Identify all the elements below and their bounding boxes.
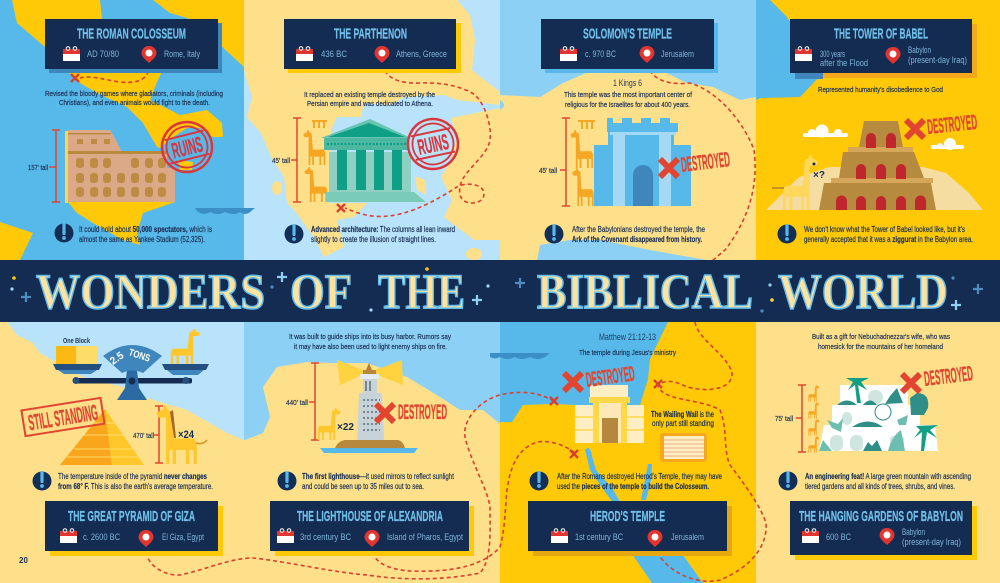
callout: Parthenon fact: slightly to create the illusion of straight lines. [311, 235, 436, 244]
callout: pyramid fact: The temperature inside of the pyramid never changes [58, 472, 207, 481]
ruler: 45 feet [539, 118, 570, 206]
heading box: Hanging Gardens: Babylon [902, 527, 925, 537]
ruler: 75 feet [775, 385, 806, 452]
text: lighthouse description: It was built to guide ships into its busy harbor. Rumors say [289, 332, 451, 341]
heading box: Parthenon: Athens, Greece [396, 49, 447, 59]
text: Parthenon description: Persian empire and was dedicated to Athena. [307, 99, 433, 108]
heading box: Tower of Babel: Babylon [908, 45, 931, 55]
heading box: Lighthouse [270, 501, 474, 556]
page number: 20 [19, 556, 28, 565]
panel: Tower of Babel [766, 19, 983, 244]
illustration: Parthenon [321, 119, 426, 202]
callout: Colosseum fact: It could hold about 50,000 spectators, which is [79, 225, 212, 234]
heading box: Parthenon [284, 19, 461, 73]
stamp: Still Standing [21, 398, 105, 436]
text: gardens description: Built as a gift for Nebuchadnezzar's wife, who was [812, 332, 950, 341]
destroyed marker [906, 111, 978, 139]
text: Herod's Temple description [579, 332, 676, 357]
text: Colosseum description: Christians), and even animals would fight to the death. [59, 98, 210, 107]
callout: pyramid fact: from 68° F. This is also the earth's average temperature. [58, 482, 213, 491]
title text [36, 263, 948, 319]
heading box: Tower of Babel: 300 years [820, 49, 845, 59]
route: Parthenon [345, 64, 490, 216]
ruler: 157 feet [28, 130, 60, 202]
callout: gardens fact [778, 471, 971, 491]
text: Herod's Temple description: Matthew 21:12-13 [599, 332, 656, 342]
illustration: balance scale: One Block [63, 336, 91, 345]
route: Herod's Temple upper [657, 322, 766, 581]
illustration: ziggurat [819, 121, 936, 210]
ruler: 470 feet [133, 406, 163, 463]
callout: pyramid fact [32, 471, 213, 491]
callout: Colosseum fact: almost the same as Yankee Stadium (52,325). [79, 235, 205, 244]
illustration: balance scale [53, 329, 209, 400]
ruler: 157 feet: 157' tall [28, 163, 48, 172]
title text: OF [290, 263, 352, 319]
callout: gardens fact: tiered gardens and all kinds of trees, shrubs, and vines. [805, 482, 955, 491]
illustration: puzzled giraffe [772, 155, 825, 210]
text: Wailing Wall note [651, 410, 714, 428]
route: Giza [146, 392, 555, 579]
destroyed marker [902, 362, 974, 392]
text: Solomon's Temple description: This temple was the most important center of [564, 90, 693, 99]
ruler: 440 feet: 440' tall [286, 398, 308, 407]
panel: Great Pyramid of Giza [19, 329, 223, 565]
destroyed marker [376, 401, 447, 424]
route: Solomon's Temple [647, 64, 755, 261]
panel: Herod's Temple [528, 332, 732, 556]
destroyed marker [660, 148, 731, 177]
heading box: Great Pyramid: c. 2600 BC [83, 532, 120, 542]
panel: Herod's Temple: DESTROYED [584, 362, 636, 392]
heading box: Hanging Gardens: (present-day Iraq) [902, 537, 961, 547]
illustration: pyramid [60, 409, 144, 465]
callout: Parthenon fact [284, 224, 455, 244]
heading box: Herod's Temple: 1st century BC [575, 532, 623, 542]
heading box: Great Pyramid [45, 501, 223, 556]
route: Colosseum [80, 64, 149, 82]
illustration: giraffes stacked [303, 120, 327, 202]
text: Solomon's Temple description [564, 78, 693, 109]
stamp: Ruins [403, 114, 463, 174]
heading box: Herod's Temple [528, 501, 732, 556]
callout: Babel fact [778, 224, 973, 244]
callout: Herod fact [530, 471, 722, 491]
ruler: 470 feet: 470' tall [133, 431, 154, 440]
text: DESTROYED [680, 148, 731, 177]
heading box: Parthenon: THE PARTHENON [334, 26, 407, 42]
panel: Lighthouse of Alexandria: DESTROYED [398, 401, 447, 424]
text: gardens description [812, 332, 950, 351]
callout: gardens fact: An engineering feat! A large green mountain with ascending [805, 472, 971, 481]
illustration: balance scale: 2.5 [108, 350, 126, 367]
illustration: lighthouse [320, 360, 418, 453]
illustration: giraffe: ×24 [178, 429, 195, 441]
icon: location X [71, 74, 79, 82]
destroyed marker [564, 362, 636, 392]
callout: Solomon's Temple fact [544, 224, 705, 244]
illustration: temple [594, 118, 691, 206]
callout: Babel fact: generally accepted that it was a ziggurat in the Babylon area. [804, 235, 973, 244]
illustration: Wailing Wall [660, 433, 707, 462]
panel: Hanging Gardens of Babylon [775, 332, 977, 560]
title text: WORLD [778, 263, 948, 319]
heading box: Roman Colosseum: AD 70/80 [87, 49, 119, 59]
text: Parthenon description [304, 90, 435, 108]
heading box: Herod's Temple: Jerusalem [671, 532, 704, 542]
ruler: 45 feet [272, 118, 301, 202]
stamp: Ruins [157, 117, 217, 177]
title text: BIBLICAL [537, 263, 753, 319]
text: lighthouse description [289, 332, 451, 351]
icons: location X marks [550, 380, 662, 458]
callout: Colosseum fact [54, 223, 212, 244]
text: lighthouse description: it may have also been used to light enemy ships on fire. [294, 342, 447, 351]
icon: giraffe on scale [171, 329, 200, 364]
heading box: Tower of Babel: (present-day Iraq) [908, 55, 967, 65]
text: Wailing Wall note: only part still standing [652, 419, 714, 428]
heading box: Roman Colosseum: THE ROMAN COLOSSEUM [77, 26, 186, 42]
callout: lighthouse fact: The first lighthouse—it used mirrors to reflect sunlight [302, 472, 455, 481]
decorative waves [195, 208, 550, 359]
heading box: Great Pyramid: El Giza, Egypt [162, 532, 204, 542]
heading box: Solomon's Temple [541, 19, 718, 73]
route: Lighthouse [373, 442, 575, 571]
heading box: Tower of Babel: THE TOWER OF BABEL [834, 26, 928, 42]
text: gardens description: homesick for the mountains of her homeland [818, 342, 943, 351]
illustration: Colosseum [65, 130, 175, 203]
ruler: 75 feet: 75' tall [775, 414, 793, 423]
heading box: Solomon's Temple: SOLOMON'S TEMPLE [583, 26, 672, 42]
callout: lighthouse fact [278, 471, 455, 491]
illustration: small giraffes [808, 385, 819, 452]
text: Wailing Wall note: The Wailing Wall is the [651, 410, 714, 419]
ruler: 45 feet: 45' tall [539, 166, 557, 175]
illustration: giraffe [318, 408, 354, 440]
callout: Parthenon fact: Advanced architecture: The columns all lean inward [311, 225, 455, 234]
heading box: Hanging Gardens: 600 BC [826, 532, 851, 542]
illustration: giraffes stacked [570, 120, 595, 206]
callout: Herod fact: After the Romans destroyed Herod's Temple, they may have [557, 472, 722, 481]
text: Colosseum description: Revised the bloody games where gladiators, criminals (including [45, 89, 223, 98]
callout: lighthouse fact: and could be seen up to 35 miles out to sea. [302, 482, 424, 491]
text: Solomon's Temple description: 1 Kings 6 [613, 78, 642, 88]
panel: Roman Colosseum [28, 19, 223, 244]
heading box: Solomon's Temple: c. 970 BC [585, 49, 616, 59]
heading box: Solomon's Temple: Jerusalem [661, 49, 694, 59]
stamp: Ruins: RUINS [415, 129, 451, 160]
text: Tower of Babel description: Represented humanity's disobedience to God [818, 85, 943, 94]
panel: Great Pyramid of Giza: STILL STANDING [27, 400, 100, 435]
heading box: Parthenon: 436 BC [321, 49, 347, 59]
heading box: Tower of Babel: after the Flood [820, 58, 868, 68]
ruler: 45 feet: 45' tall [272, 156, 290, 165]
callout: Herod fact: used the pieces of the temple to build the Colosseum. [557, 482, 709, 491]
heading box: Hanging Gardens [790, 501, 977, 560]
title banner [0, 260, 1000, 322]
illustration: temple [575, 385, 644, 443]
heading box: Roman Colosseum [45, 19, 222, 73]
text: Parthenon description: It replaced an existing temple destroyed by the [304, 90, 435, 99]
text: Herod's Temple description: The temple during Jesus's ministry [579, 348, 676, 357]
heading box: Lighthouse: 3rd century BC [300, 532, 351, 542]
heading box: Roman Colosseum: Rome, Italy [164, 49, 200, 59]
callout: Solomon's Temple fact: After the Babylonians destroyed the temple, the [572, 225, 705, 234]
icon: location X [337, 204, 345, 212]
illustration: clouds and hill [766, 124, 983, 210]
stamp: Ruins: RUINS [169, 132, 205, 163]
text: Solomon's Temple description: religious for the Israelites for about 400 years. [565, 100, 690, 109]
ruler: 440 feet [286, 363, 319, 440]
panel: Parthenon [272, 19, 463, 244]
text: Colosseum description [45, 89, 223, 107]
panel: Solomon's Temple [539, 19, 731, 244]
heading box: Lighthouse: THE LIGHTHOUSE OF ALEXANDRIA [297, 508, 443, 525]
heading box: Herod's Temple: HEROD'S TEMPLE [590, 508, 665, 525]
illustration: gardens [819, 378, 938, 451]
heading box: Great Pyramid: THE GREAT PYRAMID OF GIZA [68, 508, 195, 525]
illustration: puzzled giraffe: ×? [813, 170, 825, 181]
heading box: Lighthouse: Island of Pharos, Egypt [387, 532, 463, 542]
heading box: Tower of Babel [790, 19, 977, 79]
illustration: balance scale: TONS [127, 347, 152, 365]
panel: Lighthouse of Alexandria [270, 332, 474, 556]
illustration: giraffe: ×22 [337, 421, 354, 433]
callout: Solomon's Temple fact: Ark of the Covenant disappeared from history. [572, 235, 702, 244]
illustration: giraffe [156, 406, 207, 464]
title text: WONDERS [36, 263, 265, 319]
title text: THE [378, 263, 465, 319]
